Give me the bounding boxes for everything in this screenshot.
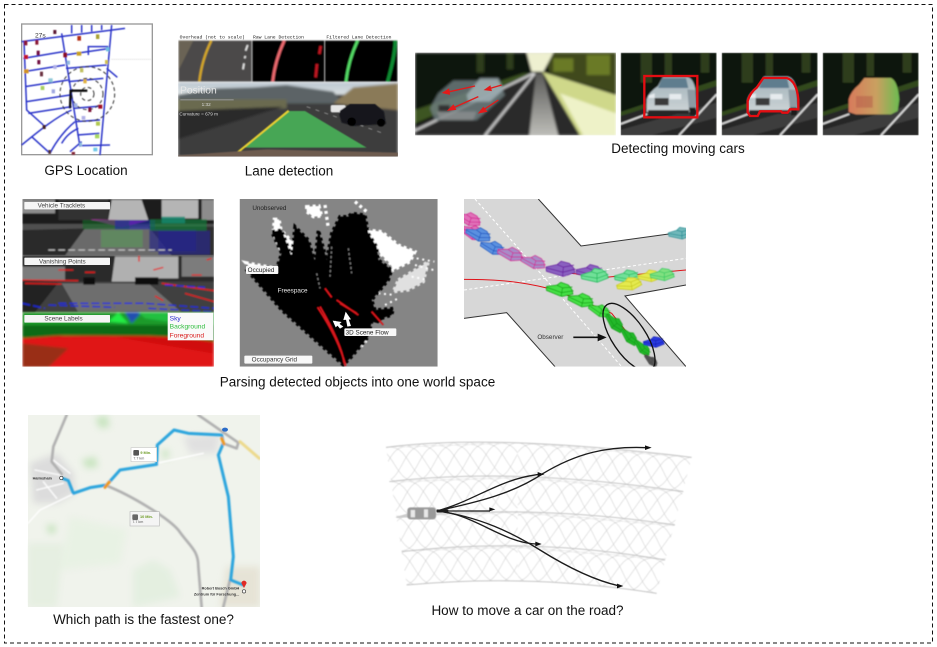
observer ellipse [602, 302, 656, 367]
GPS uncertainty circles [60, 67, 115, 121]
vehicle tracklets view [22, 199, 214, 256]
panel: GPS location map [22, 24, 152, 155]
trajectory arrowheads [489, 445, 652, 588]
GPS traced route [70, 91, 87, 108]
route label: 9 Min [131, 448, 157, 462]
segmentation photo [722, 53, 818, 135]
origin label [33, 476, 63, 481]
panel: motion planning trajectories [380, 430, 704, 600]
panel: lane detection [178, 32, 398, 157]
legend: scene labels: Sky [170, 315, 181, 322]
caption: How to move a car on the road?: How to move a car on the road? [431, 603, 624, 618]
lane overlay text: Position [180, 85, 217, 96]
intersection road [464, 199, 686, 367]
arrow: observer [573, 334, 607, 341]
panel: detecting moving cars [415, 53, 919, 135]
caption: Detecting moving cars: Detecting moving cars [611, 141, 745, 156]
lane panel captions: Overhead (not to scale) [180, 34, 245, 40]
legend: scene labels: Background [170, 324, 205, 331]
scene flow arrows [333, 312, 351, 329]
map villages [30, 453, 75, 503]
vanishing points view [22, 256, 214, 312]
caption: GPS Location: GPS Location [44, 163, 128, 178]
legend: scene labels: Foreground [170, 332, 204, 339]
caption: Lane detection: Lane detection [245, 164, 333, 178]
ego trajectories [464, 270, 686, 363]
panel: lane detection: 1:32 [202, 102, 211, 107]
overlay label: Vehicle Tracklets: Vehicle Tracklets [38, 203, 85, 210]
scene flow tracks [318, 288, 383, 366]
map terrain patches [28, 415, 260, 607]
occupancy labels [244, 205, 396, 364]
destination label and pin: Robert Bosch GmbH [202, 586, 240, 590]
route label: 9 Min: 9 Min. [140, 451, 151, 455]
fastest route [63, 430, 243, 585]
panel: road intersection 3D tracks [464, 199, 686, 367]
vehicle [395, 507, 436, 519]
overlay label: Vanishing Points [24, 258, 110, 265]
origin label: Haimshain [33, 477, 53, 481]
optical flow arrows [443, 85, 502, 113]
road scene with green lane overlay [178, 83, 398, 157]
lane panel captions: Raw Lane Detection [253, 34, 304, 40]
bounding box photo [621, 53, 717, 135]
filtered lane detection [325, 41, 397, 82]
lane panel captions: Filtered Lane Detection [326, 34, 392, 40]
overlay label: Vanishing Points: Vanishing Points [39, 258, 86, 265]
tracked cars [455, 208, 691, 369]
overlay label: Vehicle Tracklets [24, 202, 110, 210]
destination label and pin: Zentrum für Forschung... [194, 592, 239, 596]
overhead lane view [179, 41, 252, 82]
optical flow photo [415, 53, 616, 135]
panel: lane detection: Curvature = 679 m [179, 111, 218, 116]
flow colour photo [823, 53, 919, 135]
caption: Which path is the fastest one?: Which path is the fastest one? [53, 612, 234, 627]
route label: 10 Min: 10 Min. [140, 515, 153, 519]
GPS road network [22, 25, 125, 155]
caption: Parsing detected objects into one world space: Parsing detected objects into one world space [220, 374, 495, 390]
panel: occupancy grid [240, 199, 438, 367]
selected trajectories [437, 447, 647, 586]
occupancy labels: Occupancy Grid [252, 357, 298, 364]
route label: 10 Min: 7.7 km [132, 520, 143, 524]
candidate trajectory lattice [380, 430, 704, 600]
route label: 9 Min: 7.7 km [133, 456, 144, 460]
freespace [248, 213, 393, 365]
GPS scale label: 27s [35, 32, 46, 39]
scene labels view [22, 312, 214, 367]
occupancy labels: Occupied [248, 267, 275, 274]
occupied cells [246, 202, 428, 292]
panel: route map [28, 415, 260, 607]
panel: street scene analysis [22, 199, 214, 367]
occupancy labels: Unobserved [252, 205, 287, 212]
destination label and pin [194, 581, 247, 596]
overlay label: Scene Labels [24, 315, 110, 323]
overlay label: Scene Labels: Scene Labels [44, 316, 83, 323]
occupancy labels: Freespace [278, 288, 308, 295]
lane panel captions [180, 35, 392, 40]
motorway marker [222, 428, 228, 432]
observer label: Observer [537, 334, 563, 341]
raw lane detection [252, 41, 324, 82]
route label: 10 Min [130, 512, 159, 526]
minor white streets [28, 453, 203, 523]
motorway roads [52, 415, 238, 607]
occupancy labels: 3D Scene Flow [346, 329, 389, 336]
GPS coloured markers [24, 30, 109, 155]
legend: scene labels [168, 313, 213, 340]
